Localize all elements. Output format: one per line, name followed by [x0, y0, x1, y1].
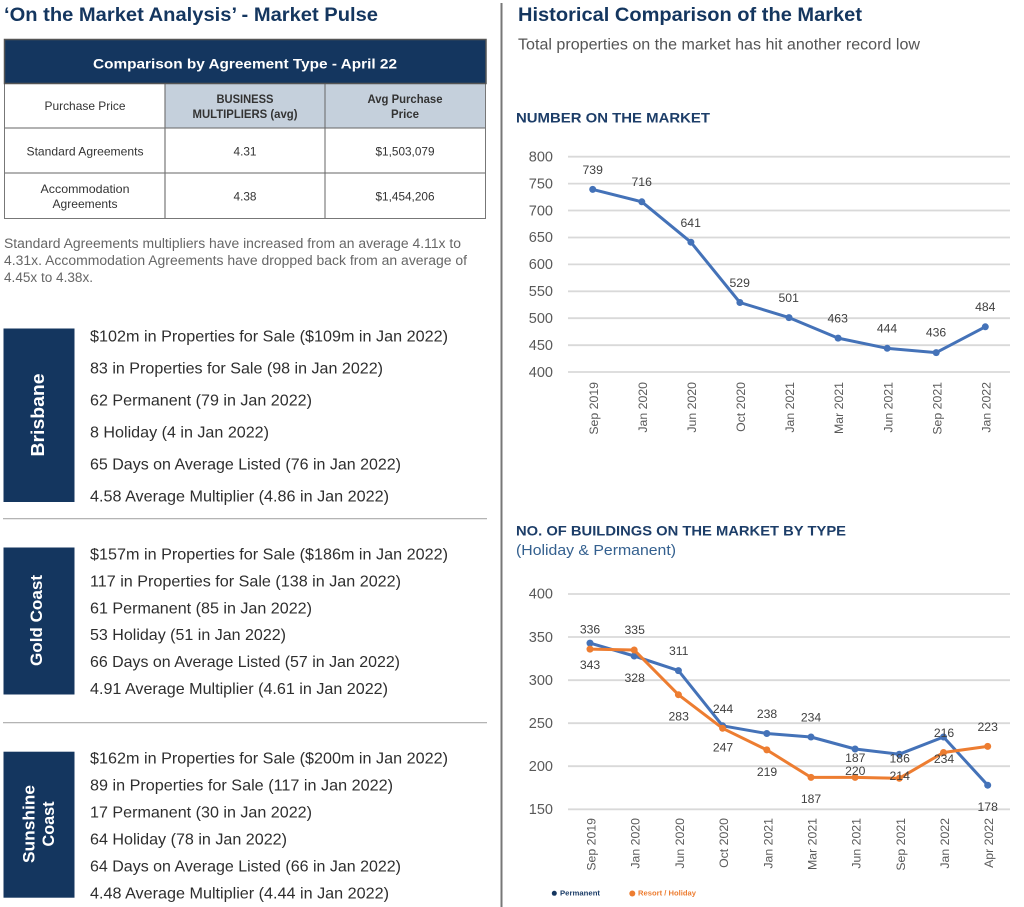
chart heading: buildings by type: NO. OF BUILDINGS ON THE MARKET BY TYPE	[516, 522, 846, 538]
data labels: 214	[890, 769, 910, 783]
x axis labels: Sep 2021	[894, 818, 908, 871]
x axis labels: Jan 2022	[980, 382, 994, 433]
heading: market pulse: ‘On the Market Analysis’ - Market Pulse	[4, 4, 378, 26]
y axis labels: 550	[529, 284, 553, 300]
Gold Coast statistics: 4.91 Average Multiplier (4.61 in Jan 2022)	[90, 681, 388, 698]
x axis labels	[587, 382, 994, 435]
x axis labels: Jan 2020	[629, 818, 643, 869]
x axis labels: Jun 2020	[673, 818, 687, 869]
data labels: 311	[669, 644, 689, 658]
x axis labels: Jan 2021	[761, 818, 775, 869]
y axis labels: 750	[529, 176, 553, 192]
data labels: 501	[779, 291, 799, 305]
x axis labels: Jan 2020	[636, 382, 650, 433]
y axis labels: 150	[529, 802, 553, 818]
data labels: 336	[580, 622, 600, 636]
panel: Gold Coast	[4, 546, 448, 698]
table: comparison by agreement type: Accommodation	[40, 182, 130, 196]
text block: multiplier commentary: 4.45x to 4.38x.	[4, 270, 93, 285]
y axis labels: 600	[529, 257, 553, 273]
chart heading: buildings by type	[516, 522, 846, 559]
data labels: 444	[877, 322, 897, 336]
x axis labels	[584, 818, 996, 871]
Sunshine Coast statistics: 64 Holiday (78 in Jan 2022)	[90, 832, 287, 848]
table: comparison by agreement type: Agreements	[52, 197, 118, 211]
data labels: 234	[801, 710, 821, 724]
Brisbane statistics	[90, 328, 448, 506]
panel: Sunshine Coast	[4, 750, 448, 902]
Brisbane label block	[4, 328, 74, 502]
y axis labels: 800	[529, 150, 553, 166]
legend item: resort / holiday: Resort / Holiday	[638, 888, 697, 898]
Sunshine Coast statistics: $162m in Properties for Sale ($200m in Jan 2022)	[90, 750, 448, 768]
x axis labels: Mar 2021	[806, 818, 820, 870]
x axis labels: Jun 2020	[685, 382, 699, 433]
table header: Comparison by Agreement Type - April 22	[93, 56, 397, 72]
x axis labels: Jan 2022	[938, 818, 952, 869]
Brisbane statistics: 62 Permanent (79 in Jan 2022)	[90, 392, 312, 410]
Sunshine Coast statistics: 4.48 Average Multiplier (4.44 in Jan 2022)	[90, 886, 389, 902]
text block: multiplier commentary: 4.31x. Accommodation Agreements have dropped back from an average of	[4, 253, 467, 268]
table: comparison by agreement type: 4.31	[234, 144, 257, 158]
data labels: 187	[845, 751, 866, 765]
data labels: 238	[757, 707, 777, 721]
y axis labels: 700	[529, 204, 553, 220]
data labels: 219	[757, 765, 777, 779]
table: comparison by agreement type: 4.38	[234, 190, 257, 204]
data labels: 343	[580, 658, 600, 672]
data labels: 436	[926, 326, 946, 340]
table: comparison by agreement type: Purchase Price	[44, 99, 126, 113]
table: comparison by agreement type: $1,503,079	[376, 144, 435, 158]
x axis labels: Mar 2021	[832, 382, 846, 434]
text block: multiplier commentary	[4, 236, 467, 285]
data labels: 186	[890, 752, 910, 766]
Gold Coast statistics: $157m in Properties for Sale ($186m in Jan 2022)	[90, 546, 448, 564]
x axis labels: Apr 2022	[982, 818, 996, 868]
x axis labels: Sep 2021	[930, 382, 944, 435]
Gold Coast statistics: 53 Holiday (51 in Jan 2022)	[90, 627, 286, 644]
table: comparison by agreement type: $1,454,206	[376, 190, 435, 204]
data labels: 335	[625, 623, 645, 637]
y axis labels: 250	[529, 716, 553, 732]
x axis labels: Sep 2019	[587, 382, 601, 435]
Gold Coast label block	[4, 548, 74, 694]
y axis labels: 300	[529, 673, 553, 689]
Gold Coast statistics: 117 in Properties for Sale (138 in Jan 2022)	[90, 574, 401, 590]
data labels: 529	[730, 276, 750, 290]
Sunshine Coast label block	[4, 752, 74, 898]
Brisbane statistics: 65 Days on Average Listed (76 in Jan 2022)	[90, 456, 401, 474]
chart heading: buildings by type: (Holiday & Permanent)	[516, 543, 676, 559]
data labels	[580, 622, 998, 814]
y axis labels: 650	[529, 230, 553, 246]
Gold Coast statistics	[90, 546, 448, 698]
y axis labels: 450	[529, 338, 553, 354]
y axis labels: 350	[529, 630, 553, 646]
y axis labels	[529, 150, 553, 381]
Brisbane statistics: 8 Holiday (4 in Jan 2022)	[90, 424, 269, 442]
Gold Coast label block: Gold Coast	[27, 575, 46, 666]
data labels: 187	[801, 792, 821, 806]
resort / holiday line	[586, 646, 991, 782]
table: comparison by agreement type: Standard Agreements	[26, 144, 144, 158]
x axis labels: Oct 2020	[717, 818, 731, 868]
Sunshine Coast statistics: 89 in Properties for Sale (117 in Jan 2022)	[90, 778, 393, 794]
data line	[589, 186, 989, 356]
data labels: 216	[934, 726, 954, 740]
data labels: 739	[583, 163, 603, 177]
permanent line	[586, 640, 991, 789]
data labels: 484	[975, 300, 996, 314]
data labels: 220	[845, 764, 866, 778]
x axis labels: Jan 2021	[783, 382, 797, 433]
data labels: 247	[713, 740, 733, 754]
data labels: 234	[934, 752, 954, 766]
Sunshine Coast statistics: 64 Days on Average Listed (66 in Jan 2022)	[90, 858, 401, 876]
data labels: 178	[978, 800, 998, 814]
table: comparison by agreement type: MULTIPLIERS (avg)	[192, 107, 298, 121]
table: comparison by agreement type: BUSINESS	[216, 92, 274, 106]
data labels	[583, 163, 996, 340]
y axis labels: 400	[529, 365, 553, 381]
x axis labels: Oct 2020	[734, 382, 748, 432]
text block: multiplier commentary: Standard Agreements multipliers have increased from an average 4.11x to	[4, 236, 461, 251]
data labels: 223	[978, 720, 998, 734]
panel: Brisbane	[4, 328, 448, 506]
data labels: 244	[713, 702, 733, 716]
Gold Coast statistics: 61 Permanent (85 in Jan 2022)	[90, 600, 312, 618]
Brisbane statistics: $102m in Properties for Sale ($109m in Jan 2022)	[90, 328, 448, 346]
legend item: permanent: Permanent	[560, 888, 601, 898]
Sunshine Coast label block: Coast	[39, 801, 58, 846]
x axis labels: Jun 2021	[850, 818, 864, 869]
table: comparison by agreement type: Price	[391, 107, 419, 121]
table: comparison by agreement type	[4, 40, 486, 218]
y axis labels	[529, 586, 553, 818]
line chart: buildings by type	[529, 586, 1010, 871]
y axis labels: 500	[529, 311, 553, 327]
chart heading: number on the market: NUMBER ON THE MARKET	[516, 110, 710, 126]
table header	[4, 40, 486, 84]
x axis labels: Sep 2019	[584, 818, 598, 871]
line chart: number on the market	[529, 150, 1010, 435]
data labels: 463	[828, 312, 848, 326]
subheading: record low: Total properties on the market has hit another record low	[518, 36, 921, 54]
data labels: 283	[669, 710, 689, 724]
y axis labels: 200	[529, 759, 553, 775]
Brisbane statistics: 4.58 Average Multiplier (4.86 in Jan 2022)	[90, 488, 389, 506]
Brisbane label block: Brisbane	[28, 373, 48, 457]
Sunshine Coast label block: Sunshine	[20, 785, 38, 863]
data labels: 328	[625, 671, 645, 685]
x axis labels: Jun 2021	[882, 382, 896, 433]
Brisbane statistics: 83 in Properties for Sale (98 in Jan 2022)	[90, 360, 383, 378]
heading: historical comparison: Historical Comparison of the Market	[518, 4, 863, 26]
data labels: 641	[681, 216, 701, 230]
Gold Coast statistics: 66 Days on Average Listed (57 in Jan 2022)	[90, 654, 400, 671]
legend	[552, 888, 697, 898]
y axis labels: 400	[529, 586, 553, 602]
table: comparison by agreement type: Avg Purchase	[368, 92, 443, 106]
data labels: 716	[632, 175, 652, 189]
Sunshine Coast statistics: 17 Permanent (30 in Jan 2022)	[90, 804, 312, 822]
Sunshine Coast statistics	[90, 750, 448, 902]
